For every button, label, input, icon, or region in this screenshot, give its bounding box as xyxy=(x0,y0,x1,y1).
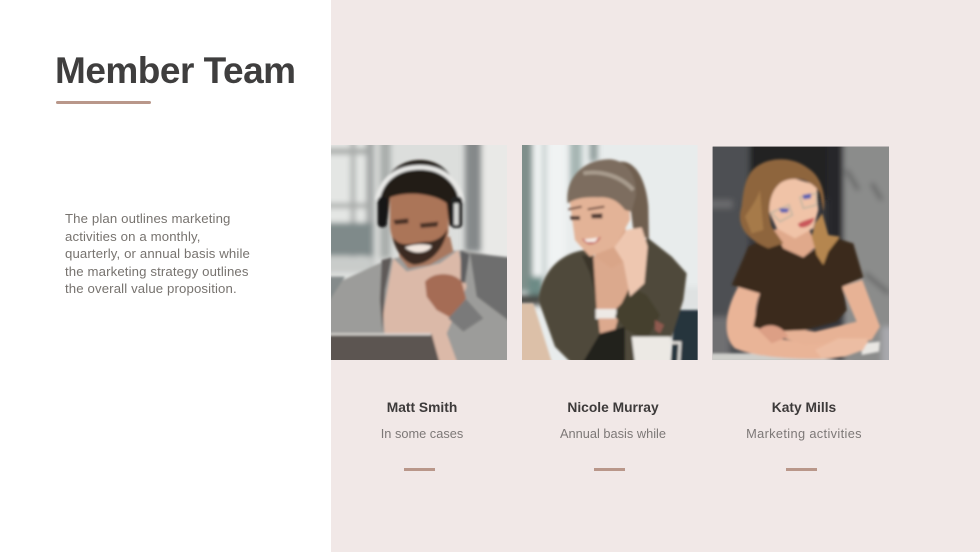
sleeve xyxy=(614,289,659,334)
neck xyxy=(772,227,816,260)
t-shirt xyxy=(383,250,467,370)
laptop xyxy=(331,334,440,360)
cuff xyxy=(448,299,483,332)
chest xyxy=(593,257,635,310)
fist xyxy=(425,274,466,318)
title underline xyxy=(56,101,151,104)
face xyxy=(568,196,632,258)
accent dash xyxy=(786,468,817,471)
member: Matt Smith xyxy=(381,400,463,471)
arms xyxy=(727,287,868,359)
accent dash xyxy=(594,468,625,471)
hands xyxy=(758,325,788,343)
photo: Matt Smith xyxy=(331,145,507,360)
description text: quarterly, or annual basis while xyxy=(65,246,250,261)
hair xyxy=(740,159,824,248)
neck xyxy=(594,228,627,258)
role: Marketing activities xyxy=(746,426,862,441)
member: Katy Mills xyxy=(746,400,862,471)
photo: Nicole Murray xyxy=(522,145,698,360)
hair xyxy=(567,159,636,212)
description text: activities on a monthly, xyxy=(65,228,201,244)
chair xyxy=(669,308,698,360)
eyes xyxy=(393,218,438,228)
panel: pink background xyxy=(331,0,980,552)
glasses xyxy=(771,193,817,222)
beard xyxy=(392,228,447,265)
ponytail xyxy=(620,162,649,240)
name: Nicole Murray xyxy=(567,400,659,415)
hand xyxy=(614,227,648,297)
description text xyxy=(65,211,250,296)
member: Nicole Murray xyxy=(560,400,666,471)
face xyxy=(390,187,448,264)
table xyxy=(712,352,848,360)
role: In some cases xyxy=(381,426,463,441)
neck xyxy=(398,237,453,268)
face xyxy=(767,177,818,238)
cardigan xyxy=(331,249,507,360)
photo: Katy Mills xyxy=(712,146,889,360)
accent dash xyxy=(404,468,435,471)
hair xyxy=(380,160,459,227)
title: Member Team xyxy=(55,50,296,91)
jacket xyxy=(538,238,687,370)
laptop xyxy=(522,302,552,360)
tee xyxy=(732,237,863,332)
name: Matt Smith xyxy=(387,400,457,415)
description text: The plan outlines marketing xyxy=(65,211,231,226)
name: Katy Mills xyxy=(772,400,836,415)
role: Annual basis while xyxy=(560,426,666,441)
description text: the marketing strategy outlines xyxy=(65,264,249,278)
headphones xyxy=(377,167,462,202)
mug xyxy=(630,334,674,360)
description text: the overall value proposition. xyxy=(65,281,237,296)
